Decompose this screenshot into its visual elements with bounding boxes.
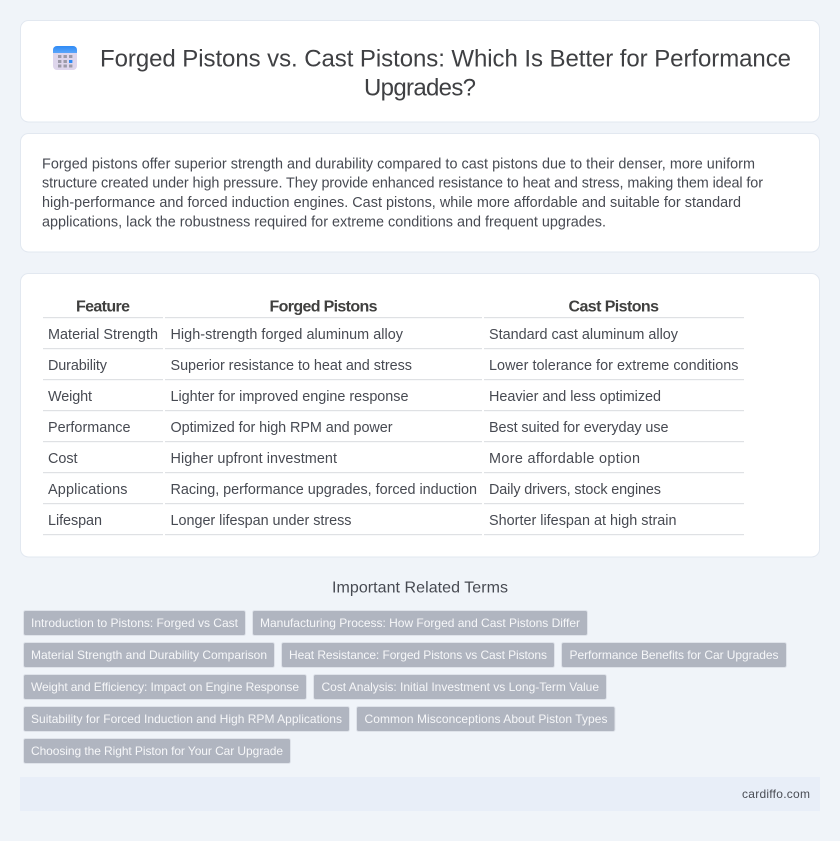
tag: Choosing the Right Piston for Your Car Upgrade: [31, 744, 283, 758]
row: material strength: High-strength forged aluminum alloy: [170, 327, 404, 343]
heading: important related terms: Important Related Terms: [332, 580, 508, 596]
tag: [562, 642, 786, 668]
row: lifespan: Shorter lifespan at high strain: [489, 513, 676, 529]
row: weight: Heavier and less optimized: [489, 389, 661, 405]
tag: [24, 706, 350, 732]
row: material strength: Material Strength: [48, 327, 158, 343]
tag: [356, 706, 615, 732]
tag: Cost Analysis: Initial Investment vs Long-Term Value: [322, 680, 599, 694]
row: durability: Lower tolerance for extreme conditions: [489, 358, 738, 374]
row: material strength: [43, 327, 744, 349]
panel: description: [20, 134, 820, 252]
tag: [24, 738, 290, 764]
title: Forged Pistons vs. Cast Pistons: Which Is Better for Performance: [100, 46, 791, 72]
row: weight: [43, 389, 744, 411]
footer bar: [20, 777, 820, 811]
tag: Weight and Efficiency: Impact on Engine Response: [31, 680, 299, 694]
row: performance: Optimized for high RPM and power: [170, 420, 393, 436]
row: lifespan: Lifespan: [48, 513, 102, 529]
tag: [24, 642, 274, 668]
tag: Heat Resistance: Forged Pistons vs Cast Pistons: [289, 648, 547, 662]
tag: [24, 674, 306, 700]
row: cost: [43, 451, 744, 473]
tag list: related terms: [24, 610, 786, 764]
row: applications: Daily drivers, stock engines: [489, 482, 661, 498]
row: lifespan: [43, 513, 744, 535]
tag: [24, 610, 246, 636]
tag: Manufacturing Process: How Forged and Cast Pistons Differ: [260, 616, 580, 630]
tag: [282, 642, 554, 668]
row: applications: Applications: [48, 482, 128, 498]
tag: Material Strength and Durability Comparison: [31, 648, 267, 662]
tag: Common Misconceptions About Piston Types: [364, 712, 608, 726]
row: durability: Superior resistance to heat and stress: [170, 358, 412, 374]
row: cost: Higher upfront investment: [170, 451, 337, 467]
row: performance: Best suited for everyday use: [489, 420, 668, 436]
tag: Performance Benefits for Car Upgrades: [570, 648, 778, 662]
tag: Introduction to Pistons: Forged vs Cast: [31, 616, 239, 630]
row: applications: Racing, performance upgrades, forced induction: [170, 482, 477, 498]
icon: calendar: [53, 46, 77, 70]
text block: summary paragraph: high-performance and forced induction engines. Cast pistons, while more affordable and suitable for standard: [42, 195, 741, 211]
row: weight: Weight: [48, 389, 92, 405]
row: cost: Cost: [48, 451, 78, 467]
table header row: Cast Pistons: [568, 298, 659, 316]
table header row: Forged Pistons: [270, 298, 378, 316]
text block: summary paragraph: structure created under high pressure. They provide enhanced resistance to heat and stress, making them ideal for: [42, 176, 763, 192]
footer source text: cardiffo.com: [742, 787, 810, 801]
row: cost: More affordable option: [489, 451, 640, 467]
table header row: Feature: [76, 298, 130, 316]
row: material strength: Standard cast aluminum alloy: [489, 327, 679, 343]
row: applications: [43, 482, 744, 504]
panel: comparison table: [20, 274, 820, 557]
row: durability: [43, 358, 744, 380]
row: weight: Lighter for improved engine response: [170, 389, 408, 405]
tag: [314, 674, 606, 700]
text block: summary paragraph: Forged pistons offer superior strength and durability compared to cast pistons due to their denser, more uniform: [42, 156, 755, 172]
title: Upgrades?: [364, 74, 476, 102]
text block: summary paragraph: applications, lack the robustness required for extreme conditions and frequent upgrades.: [42, 214, 606, 230]
table header row: [43, 298, 744, 318]
row: durability: Durability: [48, 358, 108, 374]
panel: title header: [20, 20, 820, 122]
row: performance: Performance: [48, 420, 130, 436]
row: lifespan: Longer lifespan under stress: [170, 513, 352, 529]
tag: Suitability for Forced Induction and High RPM Applications: [31, 712, 342, 726]
row: performance: [43, 420, 744, 442]
tag: [252, 610, 588, 636]
